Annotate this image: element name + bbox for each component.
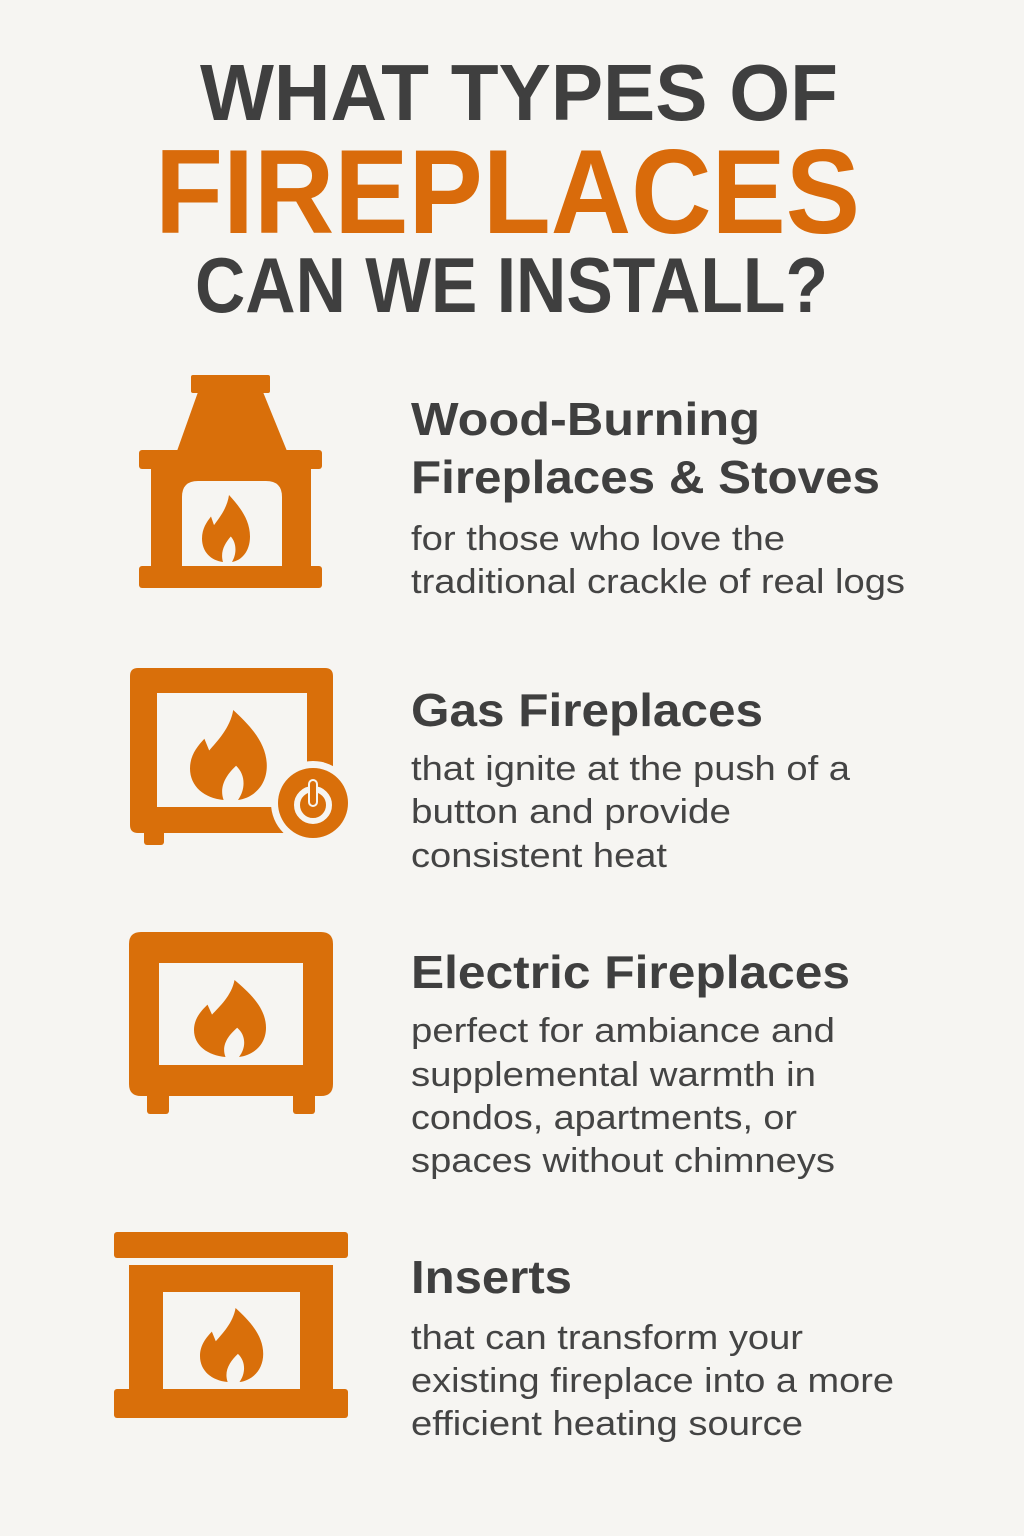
- text: inserts description: existing fireplace into a more: [411, 1362, 894, 1400]
- heading: wood-burning: Wood-Burning: [411, 393, 760, 445]
- icon: electric fireplace: [129, 932, 333, 1114]
- heading: wood-burning: [411, 393, 880, 503]
- icon: insert: [114, 1232, 348, 1418]
- text: electric description: [411, 1012, 835, 1180]
- text: wood-burning description: traditional crackle of real logs: [411, 563, 905, 601]
- title: CAN WE INSTALL?: [195, 241, 828, 329]
- text: inserts description: efficient heating source: [411, 1405, 803, 1443]
- title: [155, 48, 860, 329]
- text: electric description: supplemental warmth in: [411, 1056, 816, 1094]
- text: inserts description: [411, 1319, 894, 1443]
- text: electric description: spaces without chimneys: [411, 1142, 835, 1180]
- text: electric description: condos, apartments, or: [411, 1099, 797, 1137]
- text: inserts description: that can transform your: [411, 1319, 803, 1357]
- text: gas description: consistent heat: [411, 837, 668, 875]
- icon: wood-burning fireplace: [139, 375, 322, 588]
- title: FIREPLACES: [155, 125, 860, 259]
- title: WHAT TYPES OF: [200, 48, 838, 137]
- text: gas description: [411, 750, 850, 875]
- heading: wood-burning: Fireplaces & Stoves: [411, 451, 880, 503]
- text: electric description: perfect for ambiance and: [411, 1012, 835, 1050]
- heading: electric: Electric Fireplaces: [411, 946, 850, 998]
- heading: inserts: Inserts: [411, 1251, 572, 1303]
- icon: gas fireplace: [130, 668, 355, 845]
- heading: gas: Gas Fireplaces: [411, 684, 763, 736]
- text: wood-burning description: for those who love the: [411, 520, 785, 558]
- text: gas description: that ignite at the push of a: [411, 750, 850, 788]
- text: gas description: button and provide: [411, 793, 731, 831]
- text: wood-burning description: [411, 520, 905, 601]
